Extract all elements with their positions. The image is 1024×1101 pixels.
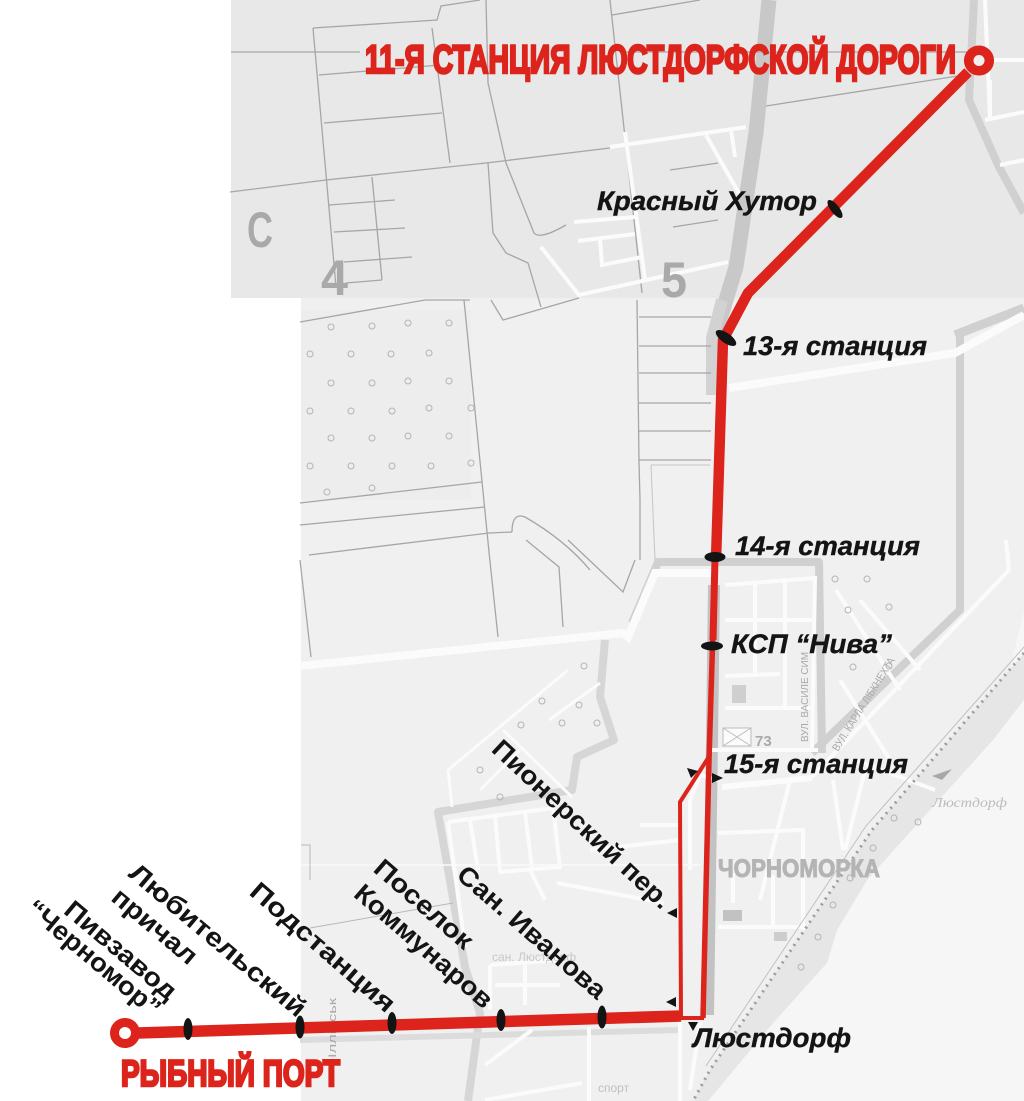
- stop label: Pionersky lane: Пионерский пер.: [486, 733, 678, 915]
- stop markers: [184, 198, 845, 1040]
- route line: thinner section to Lustdorf: [703, 630, 713, 1018]
- route line: tapering section below 14th station: [713, 558, 715, 640]
- map label Chornomorka: ЧОРНОМОРКА: [718, 855, 880, 883]
- title: fish port: РЫБНЫЙ ПОРТ: [121, 1052, 340, 1094]
- stop label: prichal: причал: [106, 881, 204, 971]
- stop label: Krasny Khutor: Красный Хутор: [597, 186, 817, 216]
- map label san: сан. Люстдорф: [492, 950, 576, 964]
- icon: post office envelope: [723, 728, 772, 750]
- map background: [230, 0, 1024, 1101]
- stop label: 15th station: 15-я станция: [724, 749, 908, 779]
- grid letter C: С: [247, 202, 273, 258]
- stop label: 14th station: 14-я станция: [735, 531, 920, 561]
- route branch: Pionersky loop: [680, 755, 710, 1018]
- stop label: San. Ivanova: Сан. Иванова: [451, 859, 613, 1005]
- grid number 4: 4: [321, 250, 348, 306]
- stop label: Lyubitelsky: Любительский: [123, 857, 313, 1023]
- stop label: Poselok: Поселок: [368, 853, 481, 956]
- terminal: 11th station ring: [969, 50, 989, 71]
- route line: lower thick section to fish port: [138, 1016, 681, 1033]
- grid number 5: 5: [661, 252, 687, 308]
- street label Illichivsk: Іллівськ: [327, 998, 339, 1058]
- stop label: Chernomor: “Черномор”: [21, 893, 167, 1023]
- stop label: Lustdorf: Люстдорф: [691, 1023, 851, 1053]
- route line: main thick upper section: [716, 72, 968, 560]
- map label sport: спорт: [598, 1081, 630, 1095]
- terminal: fish port ring: [114, 1022, 136, 1044]
- stop label: Pivzavod: Пивзавод: [59, 894, 184, 1006]
- stop label: Substation: Подстанция: [244, 876, 402, 1018]
- icon: post office envelope: 73: [755, 733, 772, 750]
- orchard dots: [307, 320, 921, 970]
- map label Lustdorf: Люстдорф: [931, 796, 1007, 811]
- stop label: Kommunarov: Коммунаров: [348, 878, 500, 1014]
- stop label: KSP Niva: КСП “Нива”: [731, 629, 893, 659]
- stop label: 13th station: 13-я станция: [743, 331, 927, 361]
- street label Karl Liebknecht: ВУЛ. КАРЛА ЛІБКНЕХТА: [830, 655, 898, 754]
- street label Vasyl Sym: ВУЛ. ВАСИЛЕ СИМ: [800, 652, 811, 742]
